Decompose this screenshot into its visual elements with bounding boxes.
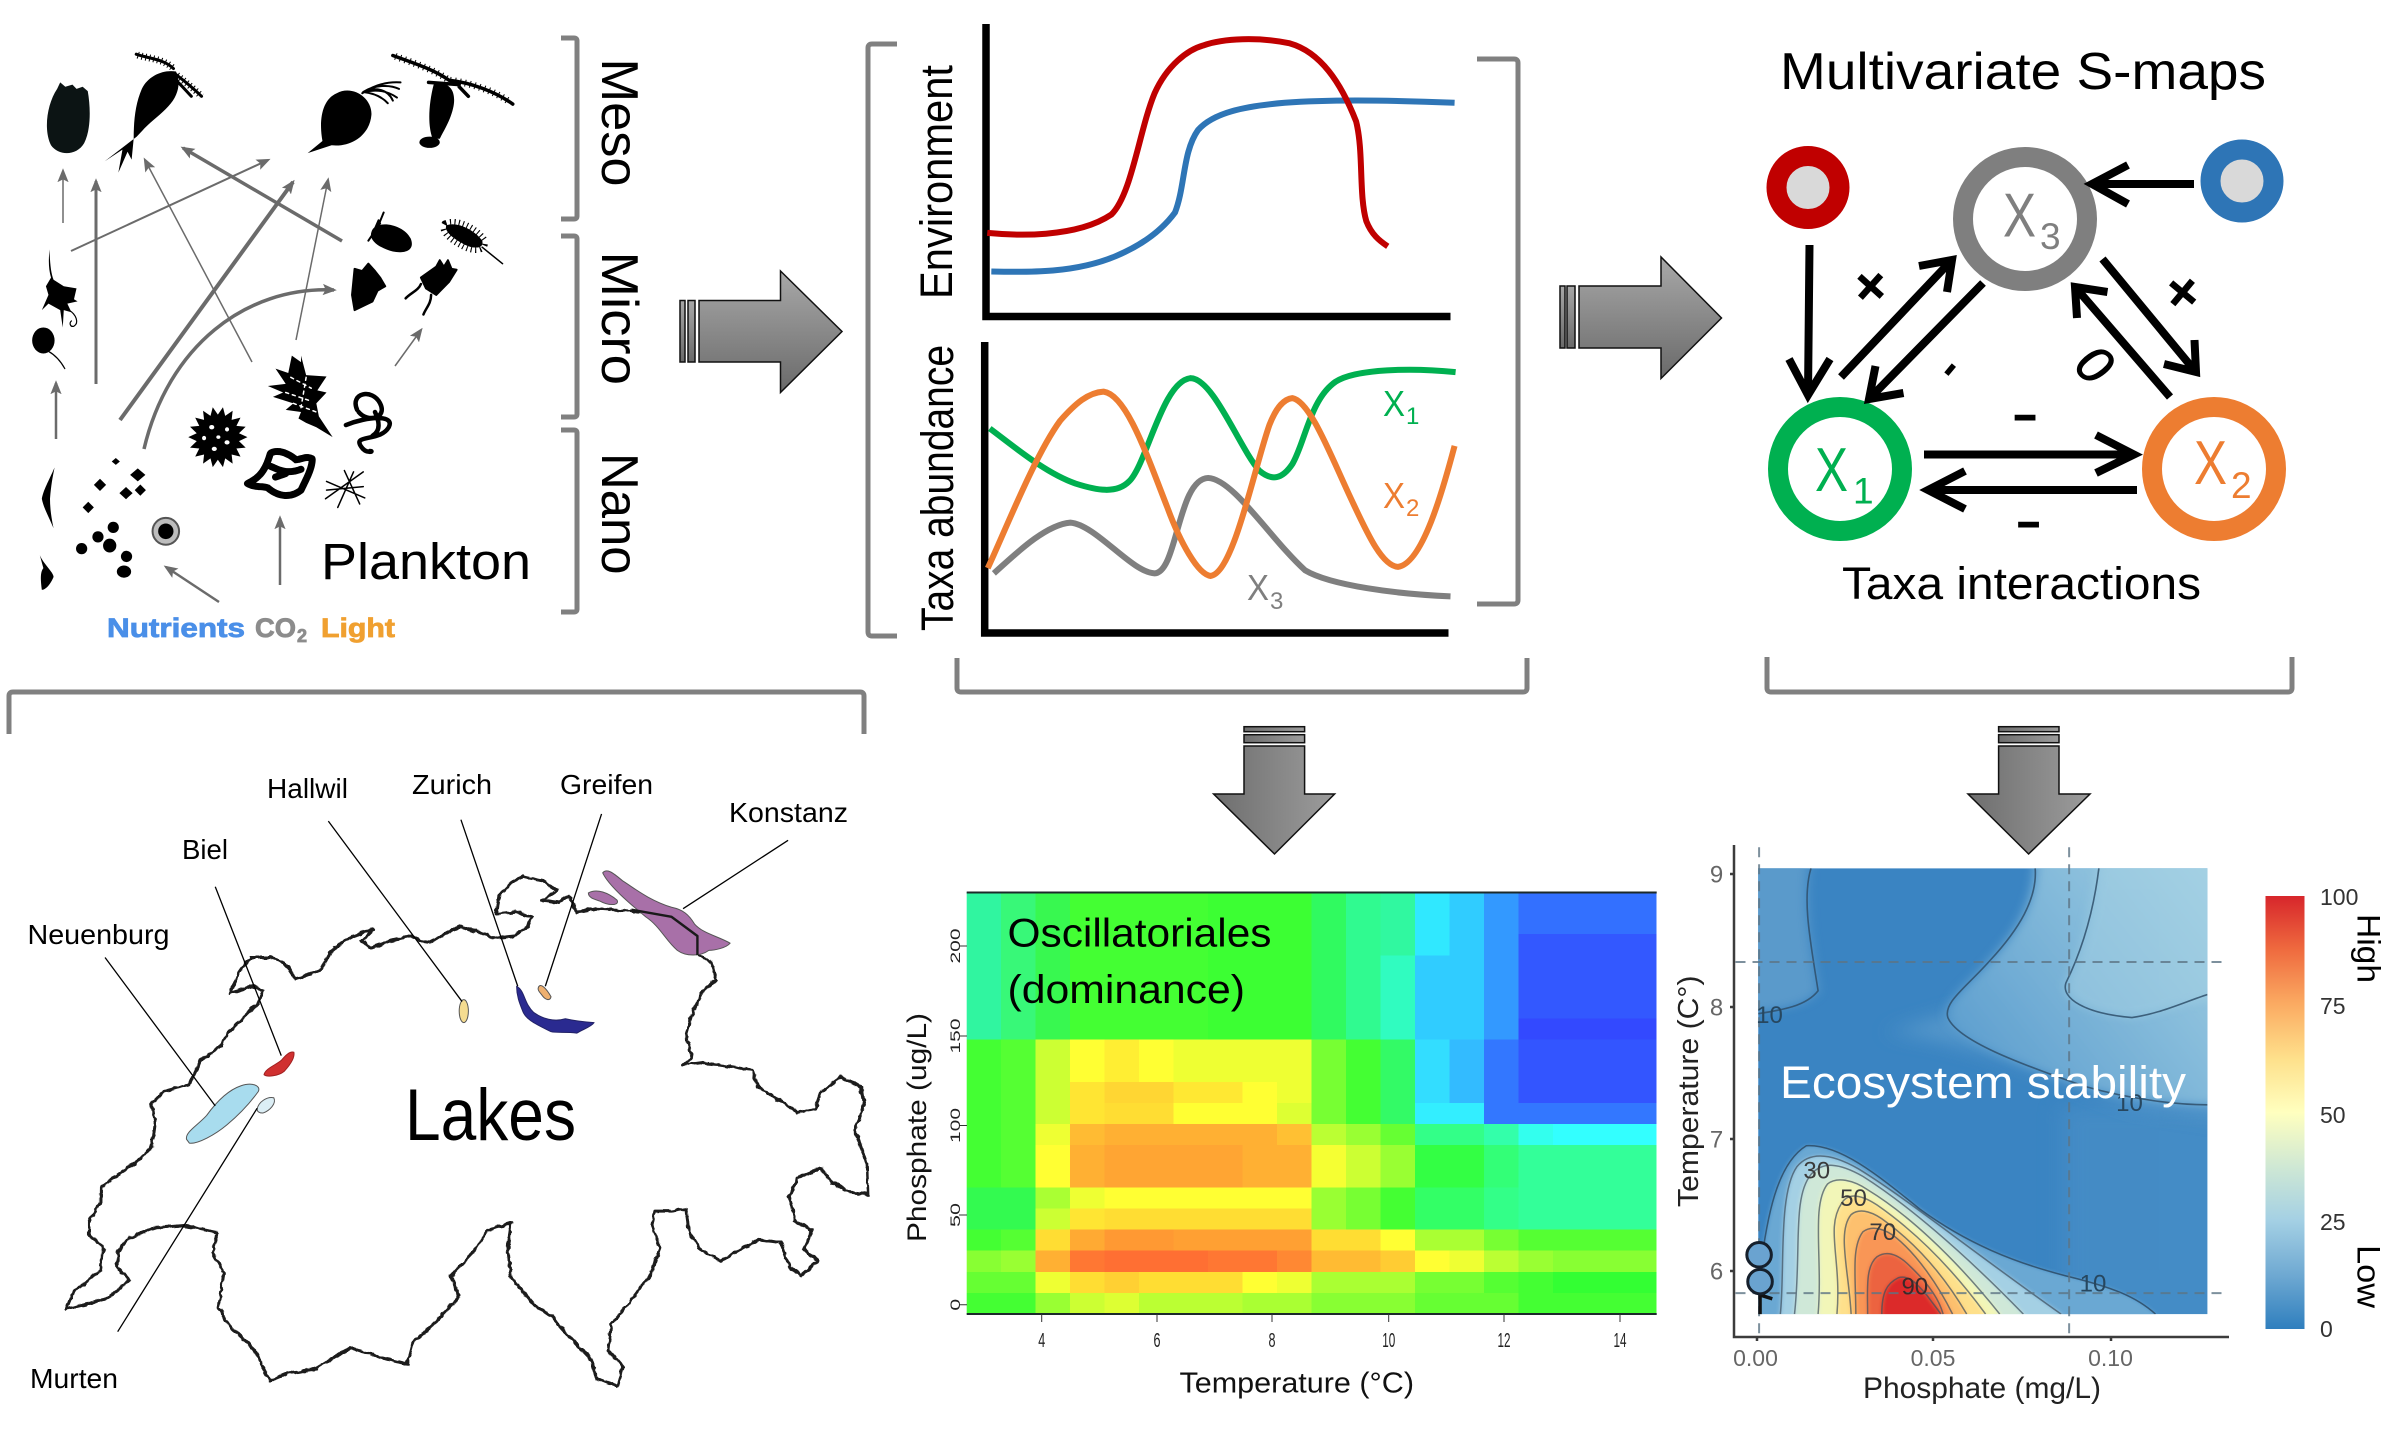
x tick labels: 0.00 xyxy=(1733,1345,1778,1371)
lake labels: Konstanz xyxy=(729,797,848,828)
heatmap x ticks xyxy=(959,946,1620,1322)
axes xyxy=(1730,845,2229,1341)
lake labels: Murten xyxy=(30,1363,118,1394)
label: X1 xyxy=(1383,383,1419,430)
title: Multivariate S-maps xyxy=(1780,43,2266,101)
heatmap y tick labels xyxy=(947,928,963,1311)
leader lines xyxy=(105,814,788,1332)
label: Nutrients CO2 Light: 2 xyxy=(297,626,307,646)
contour labels: 90 xyxy=(1901,1274,1928,1300)
interaction signs: - xyxy=(1922,344,1972,390)
arrow: down to stability plot xyxy=(1968,727,2090,854)
panel: ecosystem stability contour plot xyxy=(1673,845,2386,1405)
heatmap y tick labels: 0 xyxy=(947,1298,963,1311)
axis label: Taxa abundance: Taxa abundance xyxy=(912,345,963,631)
node: X3: X xyxy=(2003,182,2036,250)
interaction signs xyxy=(1836,249,2218,544)
colour bar labels: 50 xyxy=(2320,1102,2346,1128)
heatmap title xyxy=(1008,912,1272,1012)
arrow: time series to S-maps xyxy=(1560,257,1722,378)
label: Nano: Nano xyxy=(590,453,648,574)
label: Nutrients CO2 Light xyxy=(107,613,395,646)
bracket: below time series xyxy=(957,658,1527,692)
heatmap x tick labels: 14 xyxy=(1614,1330,1626,1352)
heatmap y tick labels: 150 xyxy=(947,1018,963,1054)
label: X2 xyxy=(1383,475,1419,522)
axis label: Phosphate mg/L: Phosphate (mg/L) xyxy=(1863,1372,2101,1405)
colour bar labels xyxy=(2320,884,2358,1342)
bracket: Nano xyxy=(561,430,577,612)
contour labels: 50 xyxy=(1840,1185,1867,1212)
map: Switzerland border xyxy=(66,876,868,1386)
axis label: Environment: Environment xyxy=(911,65,962,299)
bracket: below S-maps xyxy=(1767,657,2292,692)
panel: time series xyxy=(868,24,1527,692)
arrow: down to heatmap xyxy=(1214,727,1335,854)
panel: lakes map xyxy=(9,692,868,1394)
overlay label: Ecosystem stability: Ecosystem stability xyxy=(1780,1057,2187,1108)
label: Lakes: Lakes xyxy=(405,1075,576,1156)
panel: multivariate S-maps xyxy=(1767,43,2292,692)
node: blue driver xyxy=(2210,150,2274,212)
interaction signs: + xyxy=(2148,255,2218,329)
panel: Oscillatoriales heatmap xyxy=(902,892,1657,1400)
contour field xyxy=(1731,847,2250,1337)
heatmap y tick labels: 50 xyxy=(947,1203,963,1227)
curves: taxa xyxy=(988,370,1456,596)
bracket: left xyxy=(868,44,897,636)
panel: plankton food web xyxy=(32,38,648,646)
label: Nutrients CO2 Light: Nutrients xyxy=(107,613,245,643)
bracket: right xyxy=(1477,59,1518,604)
label: X3: 3 xyxy=(1270,588,1283,615)
colour bar labels: 25 xyxy=(2320,1209,2346,1235)
arrow: plankton to time series xyxy=(680,271,842,392)
label: Micro: Micro xyxy=(590,252,648,385)
bracket: Meso xyxy=(561,38,577,219)
heatmap title: (dominance) xyxy=(1008,968,1245,1012)
y tick labels: 8 xyxy=(1710,994,1723,1022)
heatmap x tick labels: 6 xyxy=(1154,1330,1160,1352)
y tick labels: 6 xyxy=(1710,1258,1723,1286)
bracket: above map xyxy=(9,692,864,734)
node: X3 xyxy=(1963,157,2087,281)
label: X2: 2 xyxy=(1406,495,1419,522)
heatmap x tick labels: 10 xyxy=(1382,1330,1395,1352)
axis label: Temperature: Temperature (C°) xyxy=(1673,976,1705,1207)
label: High: High xyxy=(2350,914,2386,983)
lakes xyxy=(186,871,730,1143)
contour labels: 10 xyxy=(2080,1270,2106,1298)
silhouettes: micro plankton xyxy=(32,213,503,369)
node: X1: 1 xyxy=(1853,470,1874,512)
node: X2: X xyxy=(2194,429,2227,498)
y tick labels xyxy=(1710,862,1723,1286)
node: X1 xyxy=(1778,407,1902,531)
heatmap y tick labels: 200 xyxy=(947,928,963,964)
colour bar xyxy=(2266,896,2304,1329)
colour bar labels: 75 xyxy=(2320,993,2346,1019)
label: Low: Low xyxy=(2350,1245,2386,1309)
y tick labels: 7 xyxy=(1710,1126,1723,1154)
node: X3: 3 xyxy=(2040,216,2061,257)
interaction signs: – xyxy=(2018,502,2039,544)
contour labels: 10 xyxy=(2116,1090,2143,1117)
heatmap cells xyxy=(966,892,1656,1314)
lake labels: Biel xyxy=(182,834,228,865)
chart: environment xyxy=(911,24,1455,316)
label: X3: X xyxy=(1247,567,1269,608)
label: X1: X xyxy=(1383,383,1405,424)
curves: environment drivers xyxy=(987,39,1455,272)
heatmap y tick labels: 100 xyxy=(947,1108,963,1143)
node: X2 xyxy=(2152,407,2276,531)
interaction signs: + xyxy=(1836,249,1906,323)
heatmap x tick labels xyxy=(1038,1330,1626,1352)
label: Nutrients CO2 Light: Light xyxy=(321,613,395,643)
lake labels: Neuenburg xyxy=(28,919,170,950)
contour labels xyxy=(1756,1002,2143,1300)
x tick labels: 0.05 xyxy=(1911,1345,1955,1371)
heatmap frame lines xyxy=(967,892,1657,1314)
lake labels: Hallwil xyxy=(267,773,348,804)
lake labels: Greifen xyxy=(560,769,653,800)
label: X1: 1 xyxy=(1406,403,1419,430)
contour labels: 30 xyxy=(1803,1158,1830,1184)
label: X2: X xyxy=(1383,475,1405,516)
bracket: Micro xyxy=(561,236,577,417)
heatmap x tick labels: 8 xyxy=(1268,1330,1276,1352)
axis label: Phosphate ug/L: Phosphate (ug/L) xyxy=(902,1013,932,1242)
x tick labels xyxy=(1733,1345,2133,1371)
label: Meso: Meso xyxy=(590,58,648,186)
axes xyxy=(985,342,1448,633)
label: Plankton: Plankton xyxy=(321,533,531,590)
axes xyxy=(986,24,1450,316)
food web arrows xyxy=(56,148,421,602)
label: X3 xyxy=(1247,567,1283,615)
interaction signs: 0 xyxy=(2064,334,2124,396)
colour bar labels: 0 xyxy=(2320,1316,2333,1342)
silhouettes: meso plankton xyxy=(47,54,513,173)
lake labels: Zurich xyxy=(412,769,492,800)
label: Nutrients CO2 Light: CO xyxy=(255,613,296,643)
node: X1: X xyxy=(1815,436,1848,505)
x tick labels: 0.10 xyxy=(2088,1345,2133,1371)
node: red driver xyxy=(1776,156,1840,219)
heatmap x tick labels: 12 xyxy=(1498,1330,1510,1352)
axis label: Temperature °C: Temperature (°C) xyxy=(1180,1368,1414,1400)
label: Taxa interactions: Taxa interactions xyxy=(1842,558,2201,609)
interaction arrows xyxy=(1789,165,2196,509)
y tick labels: 9 xyxy=(1710,862,1723,888)
heatmap title: Oscillatoriales xyxy=(1008,912,1272,956)
node: X2: 2 xyxy=(2231,465,2252,506)
contour labels: 10 xyxy=(1756,1002,1783,1029)
heatmap x tick labels: 4 xyxy=(1038,1330,1045,1352)
contour labels: 70 xyxy=(1869,1219,1896,1246)
colour bar labels: 100 xyxy=(2320,884,2358,910)
chart: taxa abundance xyxy=(912,342,1456,633)
interaction signs: – xyxy=(2014,395,2036,437)
lake labels xyxy=(28,769,848,1394)
silhouettes: nano plankton xyxy=(40,356,390,590)
